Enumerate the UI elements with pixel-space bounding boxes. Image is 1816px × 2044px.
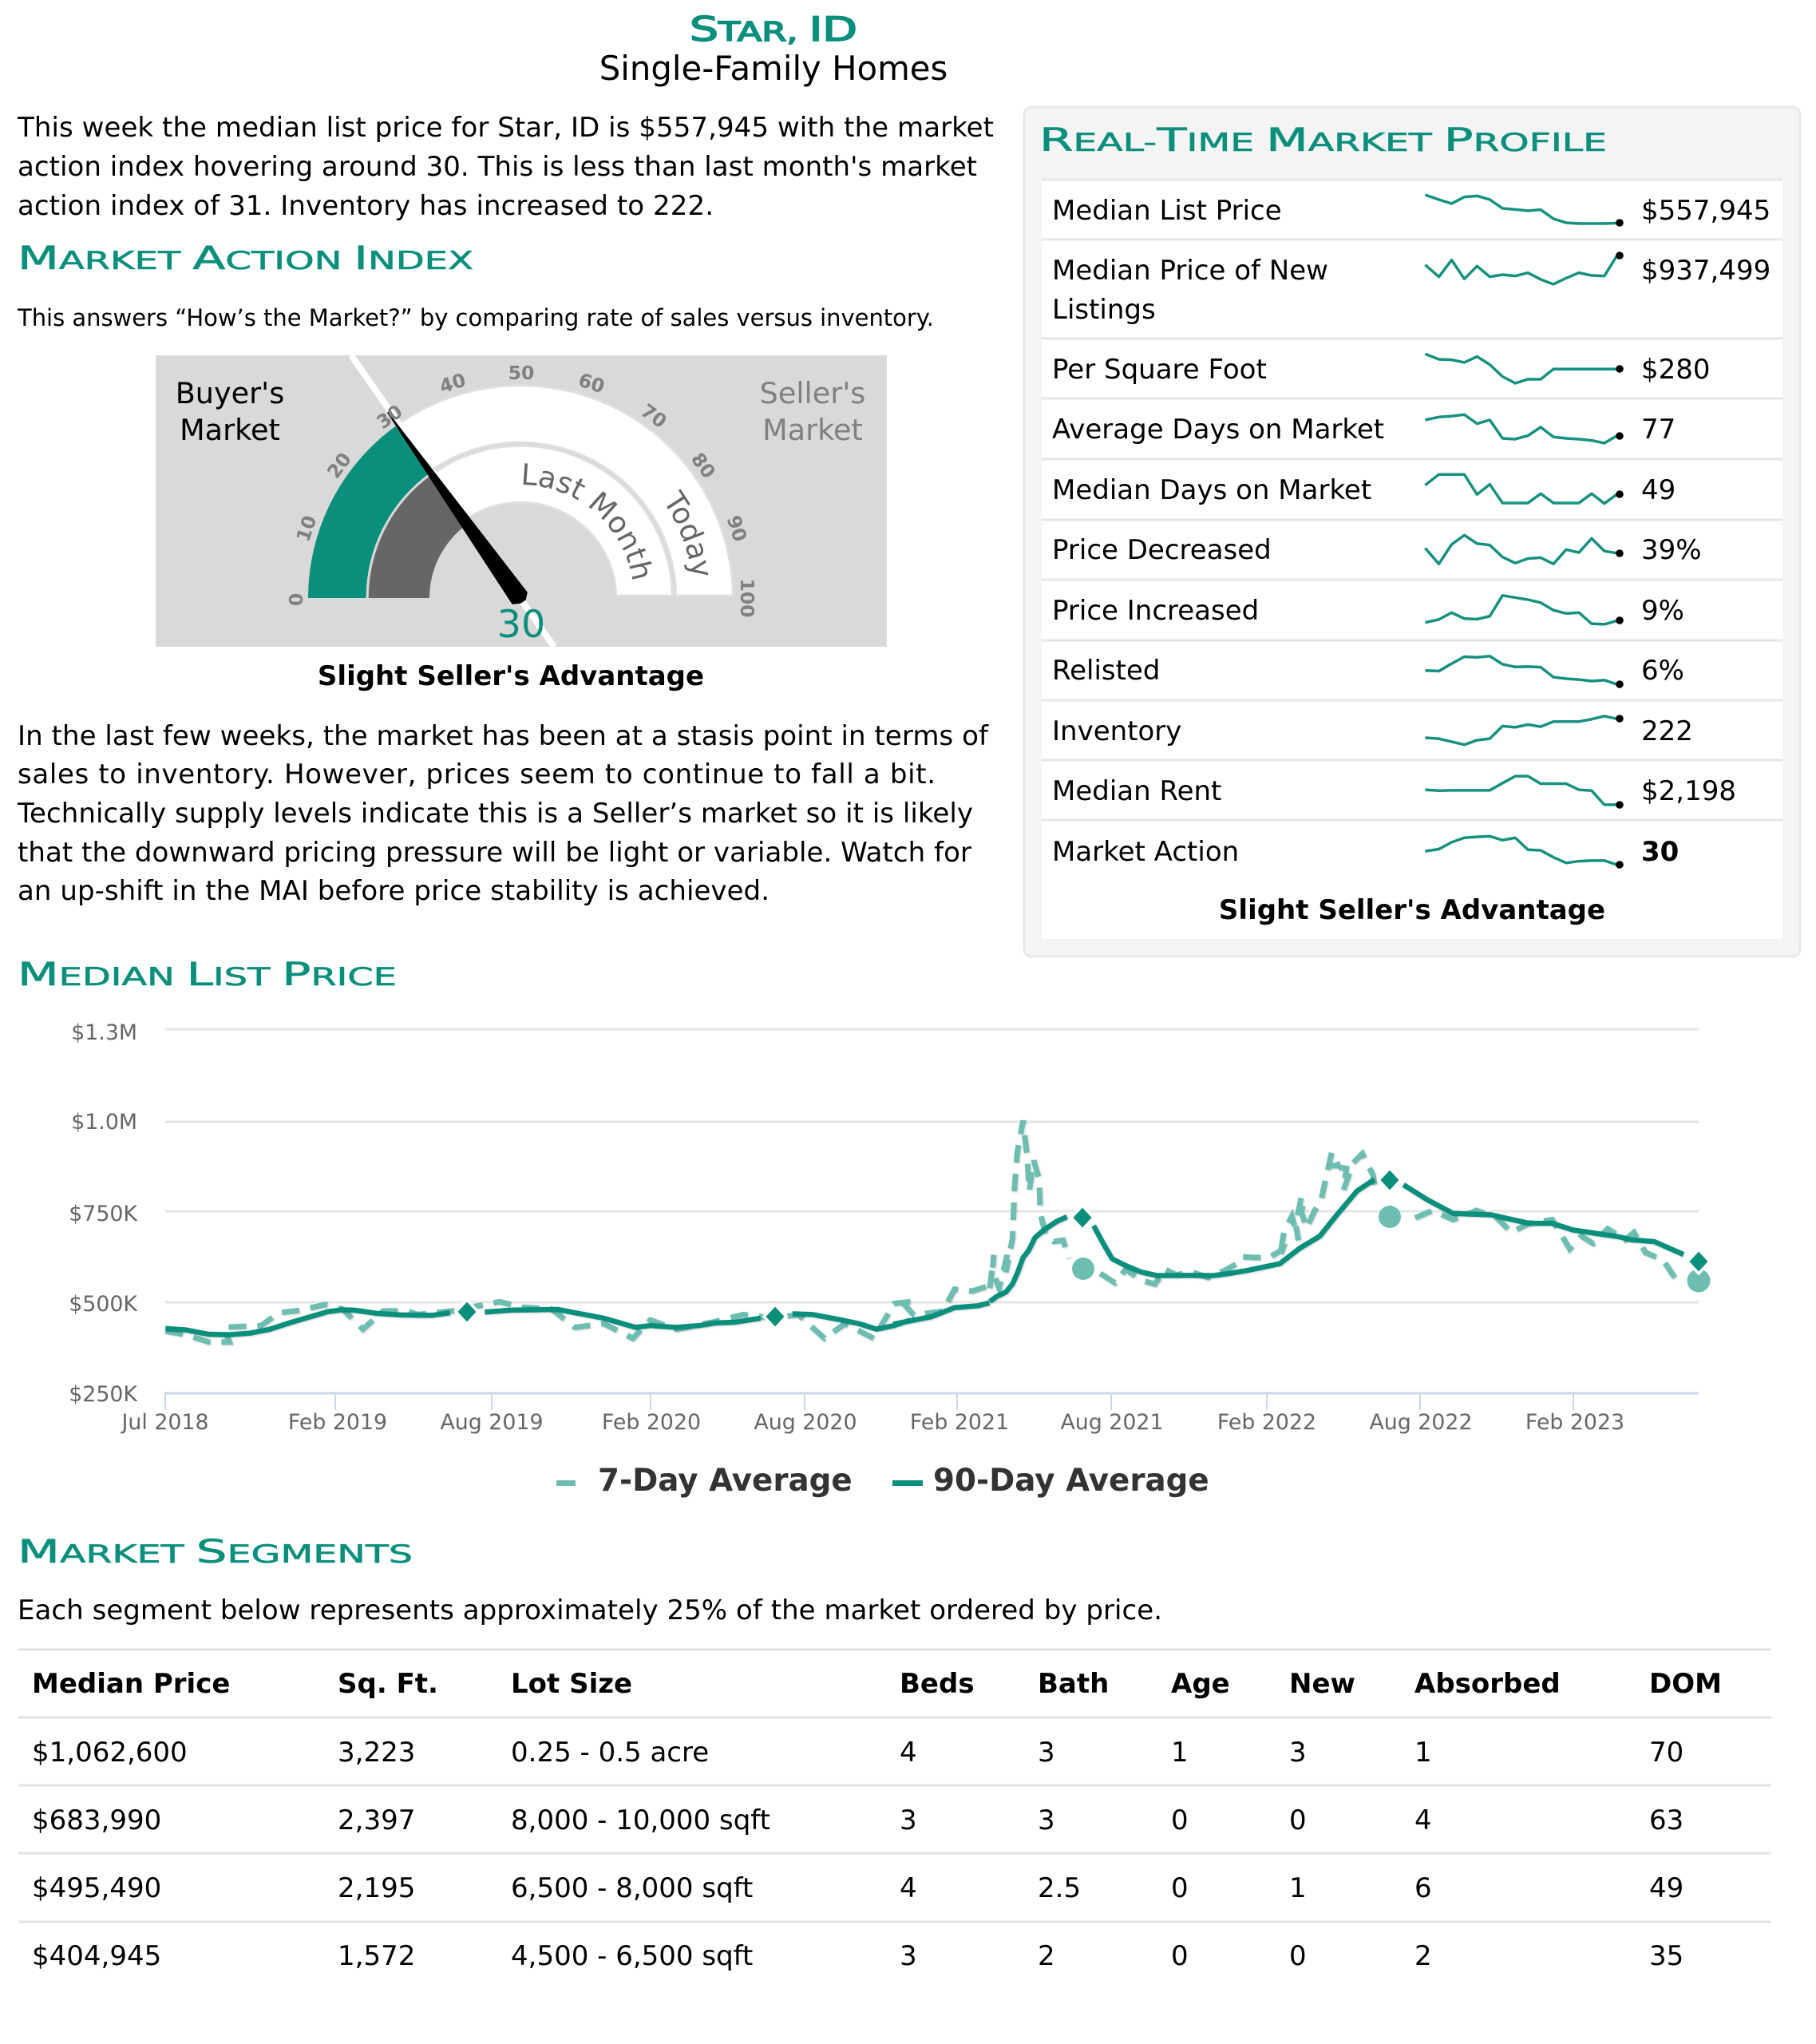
gauge: seller's market label: Market	[762, 413, 863, 447]
row: price increased: Price Increased	[1052, 595, 1259, 627]
analysis text	[17, 720, 989, 907]
row: inventory: Inventory	[1052, 715, 1181, 747]
gauge: scale labels: 90	[722, 513, 751, 545]
market action description: This answers “How’s the Market?” by comparing rate of sales versus inventory.	[17, 304, 934, 331]
gauge: scale labels: 70	[637, 399, 671, 433]
legend: 90-Day Average	[933, 1463, 1209, 1499]
table header: Beds	[900, 1668, 975, 1700]
intro text	[17, 112, 994, 222]
title	[599, 10, 948, 88]
intro text: action index of 31. Inventory has increased to 222.	[18, 190, 714, 222]
x axis labels: Aug 2020	[754, 1410, 857, 1435]
heading: median list price: M EDIAN L IST P RICE	[18, 957, 397, 993]
row: relisted: 6%	[1641, 655, 1684, 687]
table row 2: 63	[1649, 1804, 1683, 1836]
analysis text: that the downward pricing pressure will be light or variable. Watch for	[18, 837, 971, 869]
row: median list price: Median List Price	[1052, 195, 1282, 227]
gauge: divider line	[351, 355, 554, 647]
table row 3: $495,490	[32, 1872, 161, 1904]
gauge: last month ring remaining	[431, 446, 672, 596]
row: relisted: Relisted	[1052, 655, 1160, 687]
x axis labels: Jul 2018	[120, 1410, 209, 1435]
y axis labels: $250K	[69, 1382, 138, 1407]
gauge: last month label: Last Month	[524, 463, 651, 580]
gauge: value: 30	[497, 603, 545, 647]
segments description: Each segment below represents approximately 25% of the market ordered by price.	[18, 1594, 1162, 1626]
row: median list price: $557,945	[1641, 195, 1771, 227]
table row 2: 2,397	[338, 1804, 415, 1836]
x axis labels: Feb 2020	[602, 1410, 701, 1435]
table header: Absorbed	[1414, 1668, 1561, 1700]
gauge: today ring remaining	[396, 386, 733, 596]
row: inventory	[1052, 715, 1693, 747]
table row 1	[32, 1737, 1683, 1769]
panel heading: R EAL- T IME M ARKET P ROFILE	[1039, 122, 1607, 159]
gauge: scale labels: 30	[373, 400, 406, 434]
table: market segments	[18, 1650, 1771, 1972]
table row 1: 70	[1649, 1737, 1683, 1769]
table row 2	[32, 1804, 1683, 1836]
table row 2: 0	[1171, 1804, 1189, 1836]
legend	[556, 1463, 1209, 1499]
table header: DOM	[1649, 1668, 1722, 1700]
table header: Age	[1171, 1668, 1230, 1700]
table row 2: 4	[1414, 1804, 1432, 1836]
table row 1: 3	[1038, 1737, 1055, 1769]
row: median price of new listings: $937,499	[1641, 255, 1771, 287]
table row 3: 4	[900, 1872, 917, 1904]
y axis labels: $1.0M	[71, 1110, 137, 1135]
row: median list price	[1052, 195, 1771, 227]
table row 4: 2	[1414, 1940, 1432, 1972]
x axis labels: Aug 2022	[1369, 1410, 1473, 1435]
x axis labels: Aug 2021	[1060, 1410, 1164, 1435]
analysis text: Technically supply levels indicate this is a Seller’s market so it is likely	[17, 798, 973, 830]
gauge: buyer's market label	[176, 376, 284, 447]
y axis labels: $750K	[69, 1202, 138, 1226]
gauge: scale labels: 20	[322, 449, 356, 482]
intro text: This week the median list price for Star, ID is $557,945 with the market	[17, 112, 994, 144]
row: average days on market: Average Days on Market	[1052, 414, 1384, 446]
table row 4	[32, 1940, 1683, 1972]
row: median price of new listings: Median Price of New	[1052, 255, 1328, 287]
row: median price of new listings	[1052, 252, 1771, 326]
table row 3: 49	[1649, 1872, 1683, 1904]
analysis text: sales to inventory. However, prices seem to continue to fall a bit.	[18, 759, 936, 790]
table row 3: 0	[1171, 1872, 1189, 1904]
x axis labels	[120, 1410, 1624, 1435]
gauge: scale labels: 60	[576, 369, 607, 398]
title: Single-Family Homes	[599, 49, 948, 88]
gauge: scale labels: 10	[292, 513, 321, 545]
title: S TAR, ID	[690, 10, 857, 49]
gauge: today label: Today	[667, 489, 709, 575]
table row 4: 2	[1038, 1940, 1055, 1972]
gauge: buyer's market label: Buyer's	[176, 376, 284, 410]
panel caption: Slight Seller's Advantage	[1219, 894, 1605, 926]
table row 3: 2,195	[338, 1872, 415, 1904]
gauge caption: Slight Seller's Advantage	[318, 660, 704, 692]
table header: New	[1289, 1668, 1355, 1700]
table row 4: 0	[1289, 1940, 1307, 1972]
row: median rent	[1052, 775, 1736, 809]
table header: Median Price	[32, 1668, 230, 1700]
series: 90-day average	[165, 1179, 1683, 1335]
table row 3: 2.5	[1038, 1872, 1081, 1904]
table row 2: 3	[900, 1804, 917, 1836]
gauge: seller's market label: Seller's	[760, 376, 865, 410]
gauge: scale labels: 50	[508, 362, 534, 384]
table row 2: 8,000 - 10,000 sqft	[511, 1804, 770, 1836]
x axis labels: Aug 2019	[440, 1410, 544, 1435]
analysis text: In the last few weeks, the market has been at a stasis point in terms of	[18, 720, 989, 752]
y axis labels: $1.3M	[71, 1020, 137, 1045]
row: average days on market	[1052, 414, 1676, 446]
row: relisted	[1052, 655, 1684, 688]
table row 3: 6	[1414, 1872, 1432, 1904]
x axis labels: Feb 2023	[1525, 1410, 1624, 1435]
intro text: action index hovering around 30. This is less than last month's market	[18, 151, 977, 183]
row: median rent: $2,198	[1641, 775, 1736, 807]
row: market action: 30	[1641, 836, 1679, 868]
gauge: scale labels: 80	[686, 449, 720, 482]
markers: 90-day average	[456, 1168, 1710, 1329]
gauge: buyer's market label: Market	[180, 413, 280, 447]
table row 1: 1	[1414, 1737, 1432, 1769]
row: per square foot	[1052, 354, 1711, 386]
row: price decreased: 39%	[1641, 534, 1702, 566]
table row 1: 4	[900, 1737, 917, 1769]
row: median days on market: Median Days on Market	[1052, 474, 1371, 506]
x axis labels: Feb 2021	[910, 1410, 1009, 1435]
table header: Sq. Ft.	[338, 1668, 438, 1700]
markers: 7-day average	[1072, 1206, 1710, 1292]
table row 4: 0	[1171, 1940, 1189, 1972]
gauge: today value arc	[308, 426, 429, 598]
row: price decreased	[1052, 534, 1702, 566]
table row 1: $1,062,600	[32, 1737, 188, 1769]
gauge: scale labels: 0	[285, 593, 307, 606]
legend: 7-Day Average	[598, 1463, 853, 1499]
x axis labels: Feb 2019	[288, 1410, 387, 1435]
gauge: needle	[388, 413, 527, 604]
row: median days on market	[1052, 474, 1676, 506]
y axis labels	[69, 1020, 138, 1407]
table row 4: 3	[900, 1940, 917, 1972]
table row 2: 0	[1289, 1804, 1307, 1836]
row: per square foot: Per Square Foot	[1052, 354, 1267, 386]
table row 1: 3,223	[338, 1737, 415, 1769]
row: median price of new listings: Listings	[1052, 294, 1156, 326]
line chart: median list price	[69, 1020, 1710, 1499]
row: price increased	[1052, 595, 1684, 627]
table row 2: 3	[1038, 1804, 1055, 1836]
row: market action	[1052, 836, 1679, 869]
table row 3: 6,500 - 8,000 sqft	[511, 1872, 753, 1904]
table header	[32, 1668, 1722, 1700]
table row 1: 1	[1171, 1737, 1189, 1769]
row: median rent: Median Rent	[1052, 775, 1221, 807]
table header: Bath	[1038, 1668, 1109, 1700]
x axis labels: Feb 2022	[1217, 1410, 1316, 1435]
table header: Lot Size	[511, 1668, 632, 1700]
series: 7-day average	[165, 1120, 1678, 1342]
table row 3: 1	[1289, 1872, 1307, 1904]
table row 2: $683,990	[32, 1804, 161, 1836]
row: market action: Market Action	[1052, 836, 1239, 868]
row: price increased: 9%	[1641, 595, 1684, 627]
row: median days on market: 49	[1641, 474, 1676, 506]
panel: real-time market profile	[1024, 107, 1800, 957]
heading: market segments: M ARKET S EGMENTS	[18, 1534, 413, 1571]
gauge: scale labels	[285, 362, 758, 618]
row: inventory: 222	[1641, 715, 1693, 747]
row: per square foot: $280	[1641, 354, 1711, 386]
table row 3	[32, 1872, 1683, 1904]
gauge: seller's market label	[760, 376, 865, 447]
table row 4: $404,945	[32, 1940, 161, 1972]
table row 1: 0.25 - 0.5 acre	[511, 1737, 709, 1769]
analysis text: an up-shift in the MAI before price stability is achieved.	[18, 875, 770, 907]
y axis labels: $500K	[69, 1292, 138, 1317]
gauge: scale labels: 40	[437, 369, 469, 398]
gauge: market action index	[156, 355, 887, 647]
table row 1: 3	[1289, 1737, 1307, 1769]
row: average days on market: 77	[1641, 414, 1676, 446]
row: price decreased: Price Decreased	[1052, 534, 1272, 566]
table row 4: 35	[1649, 1940, 1683, 1972]
heading: market action index: M ARKET A CTION INDEX	[18, 240, 473, 277]
table row 4: 1,572	[338, 1940, 415, 1972]
gauge: last month value arc	[369, 475, 467, 598]
gauge: scale labels: 100	[736, 578, 758, 618]
table row 4: 4,500 - 6,500 sqft	[511, 1940, 753, 1972]
